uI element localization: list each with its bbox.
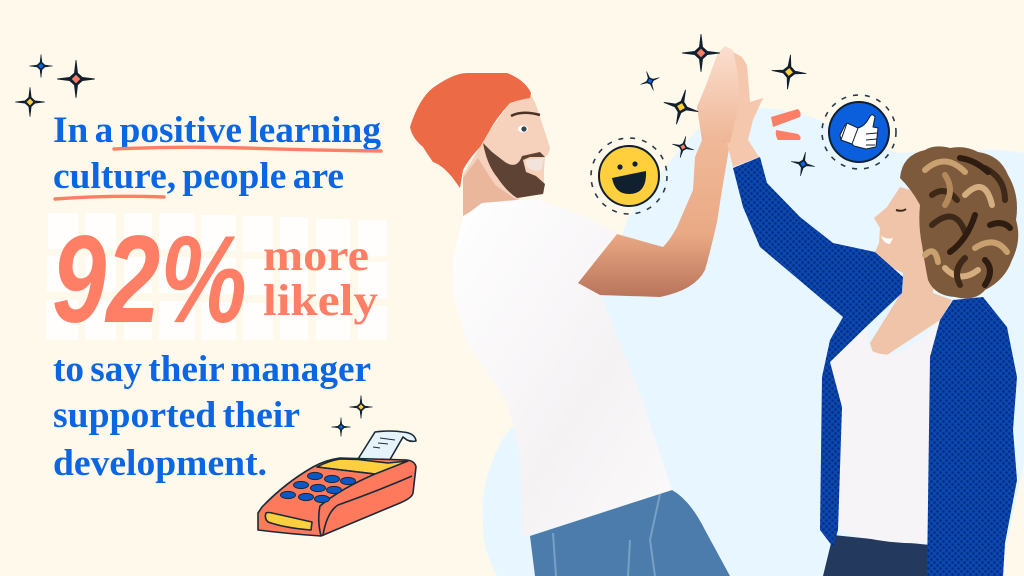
man beard (483, 143, 545, 198)
sparkles around hands (637, 34, 817, 178)
photo: woman high-fiving (733, 146, 1018, 576)
woman forearm and hand (727, 53, 763, 167)
man jeans seams (553, 494, 660, 576)
body text bottom: to say their manager (53, 349, 371, 390)
woman jeans (823, 535, 930, 576)
man jeans (530, 490, 730, 576)
photo: man high-fiving (410, 46, 763, 576)
woman smile (881, 236, 893, 244)
more likely: more (263, 231, 369, 280)
heading text top: culture, people are (53, 156, 344, 197)
man hand (697, 46, 740, 143)
more likely (263, 231, 378, 325)
woman hair (900, 146, 1018, 298)
coral underlines (55, 147, 381, 199)
sparkles above terminal (332, 396, 372, 436)
man neck and face (463, 95, 550, 215)
statistic 92%: 92% (52, 211, 247, 349)
man hat (410, 73, 531, 188)
woman neck and face (870, 187, 952, 355)
heading text top: In a positive learning (53, 110, 381, 151)
body text bottom: development. (53, 443, 267, 484)
body text bottom (53, 349, 371, 484)
hair curls (925, 158, 1010, 285)
woman white top (830, 320, 940, 543)
woman cardigan (733, 157, 1017, 576)
man arm (578, 46, 738, 297)
body text bottom: supported their (53, 395, 300, 436)
icon: smiley with dashed ring (591, 138, 667, 214)
coral emphasis marks (771, 109, 801, 140)
light blue backdrop blob (482, 108, 1024, 576)
sparkles left (16, 54, 94, 116)
icon: payment terminal (258, 431, 416, 536)
more likely: likely (263, 276, 378, 325)
man mouth (526, 158, 544, 170)
man t-shirt (453, 200, 672, 537)
woman eye (896, 209, 906, 211)
white tile grid behind statistic (46, 213, 387, 340)
heading text top (53, 110, 381, 197)
icon: thumbs up with dashed ring (822, 95, 896, 169)
man eye and brow (511, 113, 540, 132)
man neck shadow (463, 158, 517, 216)
